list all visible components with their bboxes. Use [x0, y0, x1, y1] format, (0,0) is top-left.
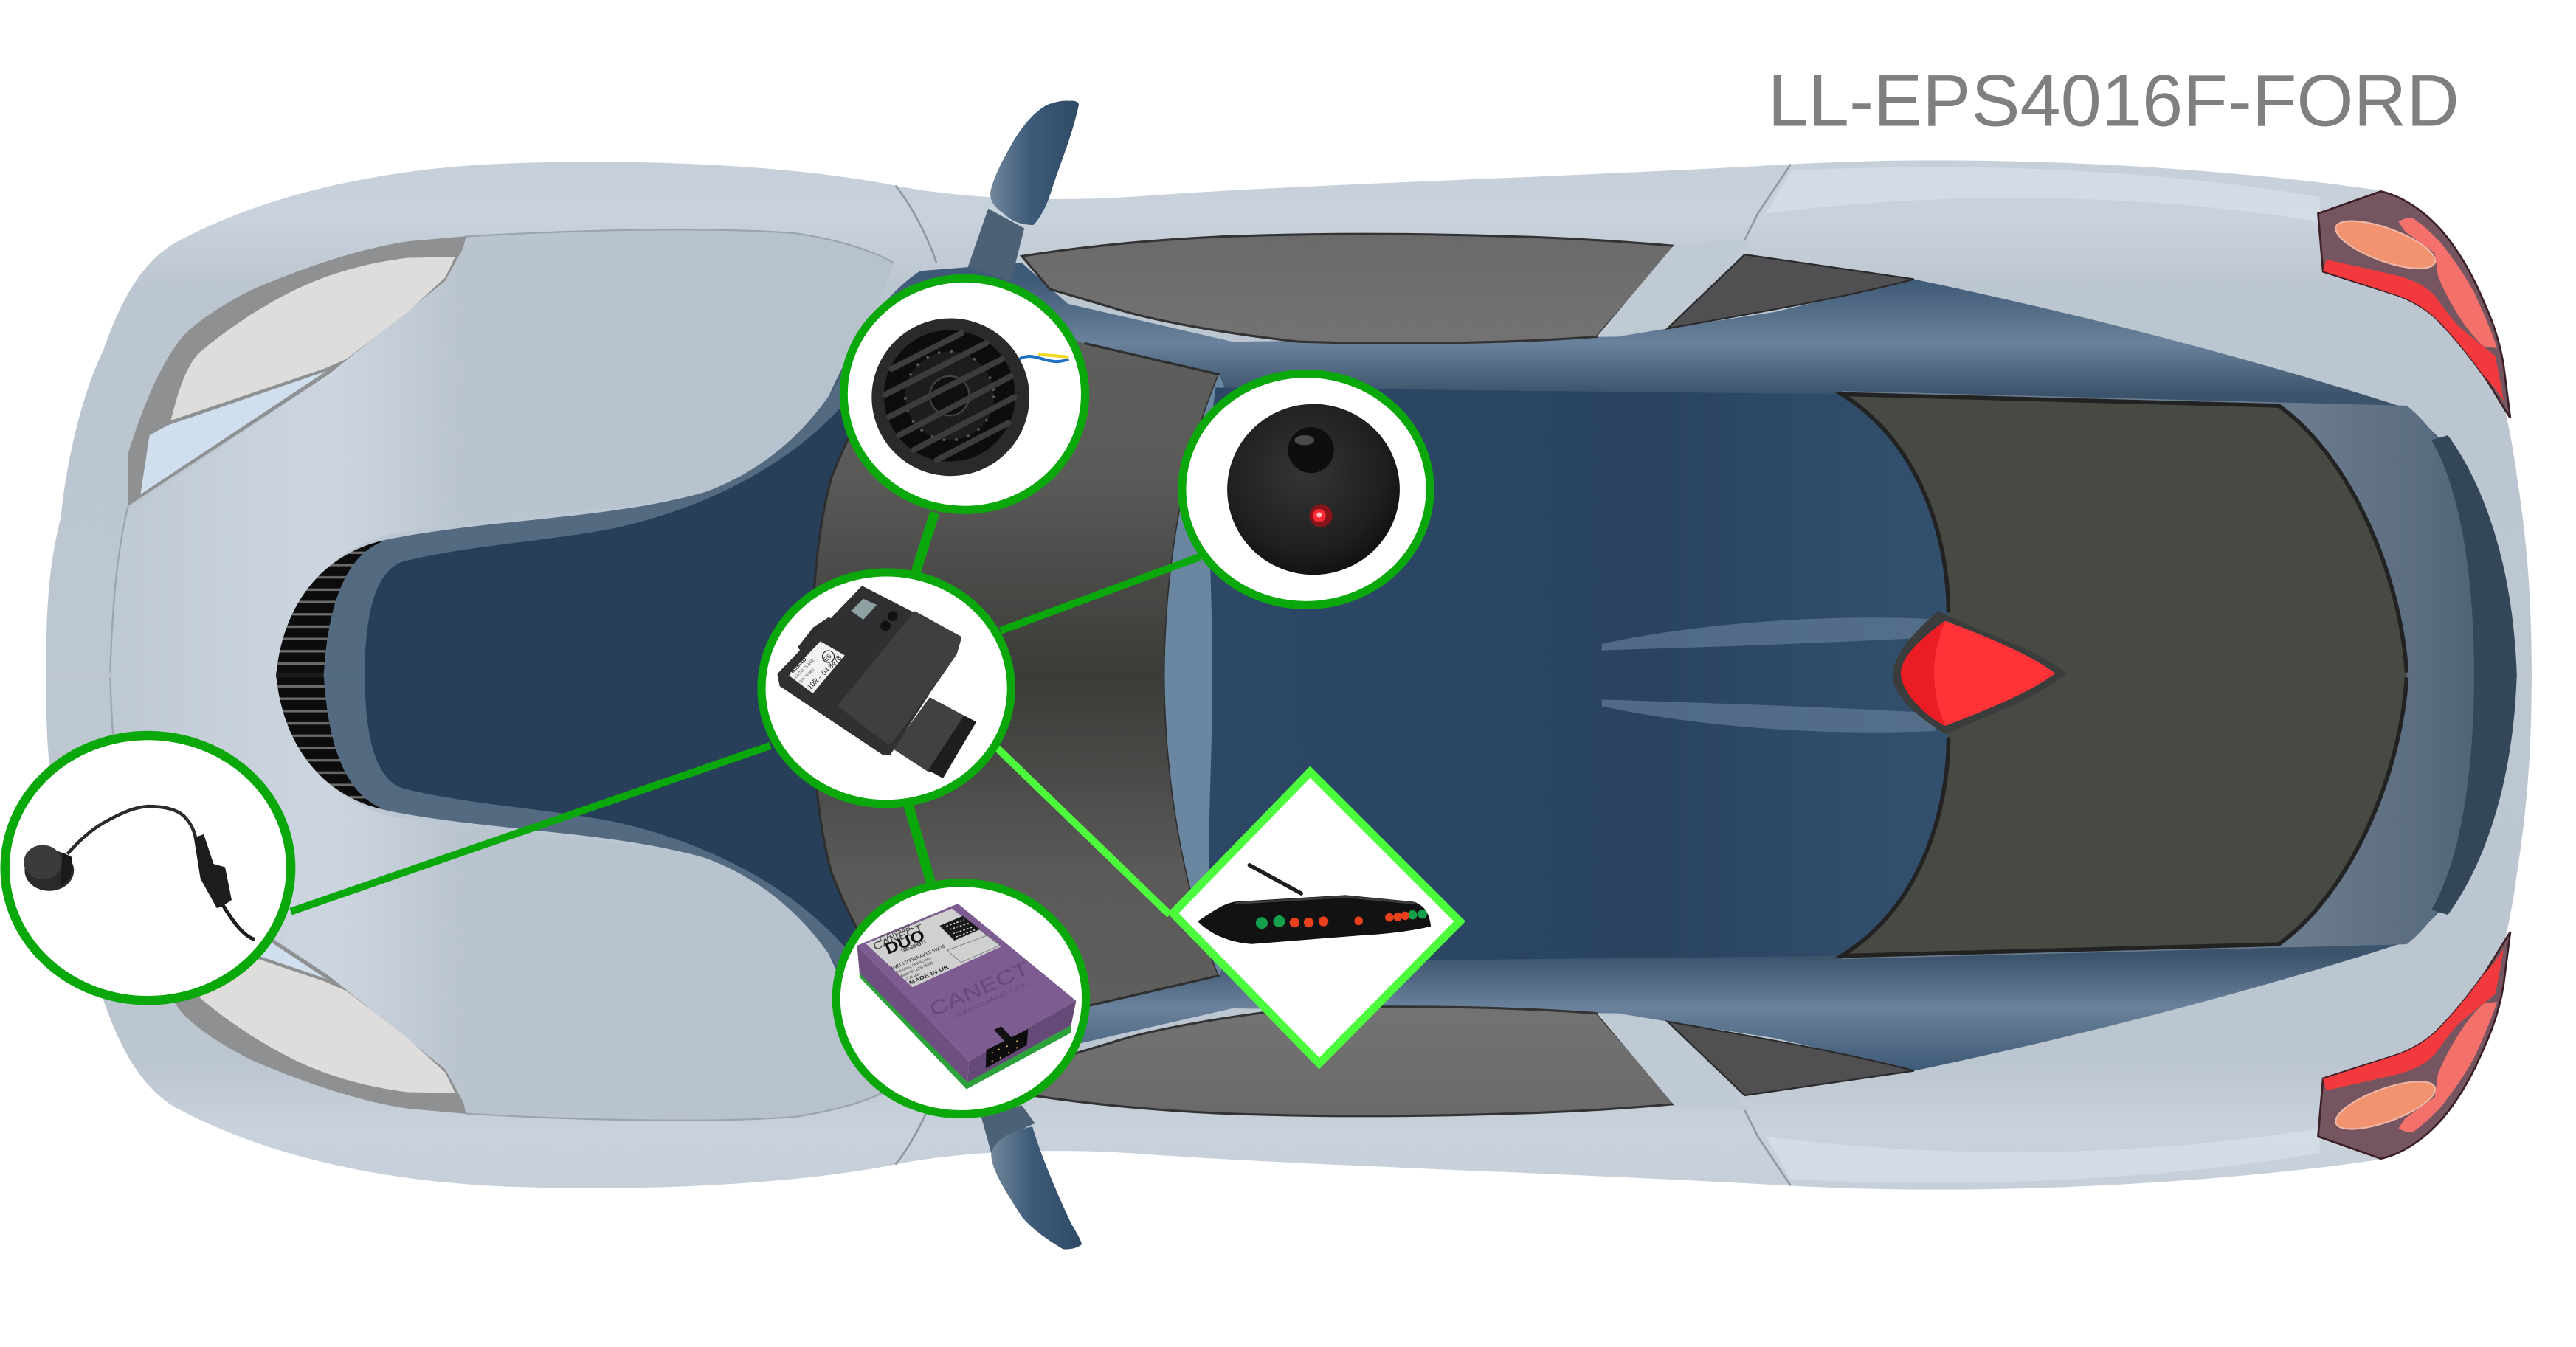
- icon: black module: [777, 586, 976, 778]
- side window: [1022, 234, 1679, 343]
- unit embossed logo: CANECT: [926, 958, 1032, 1021]
- tail light: [2318, 191, 2510, 418]
- unit label: MADE IN UK: [908, 963, 950, 986]
- rear quarter window: [1668, 254, 1914, 328]
- unit label: [866, 909, 1001, 987]
- diamond: wireless LED display: [1173, 772, 1460, 1064]
- unit embossed logo: [926, 958, 1032, 1021]
- icon: round speaker grille: [871, 318, 1068, 476]
- roof: [1209, 387, 1948, 676]
- hood seam: [895, 165, 1791, 263]
- unit label: CANECT: [871, 923, 925, 953]
- module label: [786, 641, 845, 693]
- unit label: CANM8: [878, 924, 912, 944]
- body highlight rear: [1766, 167, 2320, 222]
- connector: module to sensor: [291, 746, 770, 912]
- unit label: 12 24 Vdc: [904, 972, 921, 983]
- centre line patch joining both halves: [46, 673, 2532, 677]
- connector: module to vent: [916, 513, 935, 572]
- windshield: [812, 304, 1219, 676]
- unit label: Batch No: 1234 56789: [900, 961, 933, 979]
- hood scoop vent: [276, 537, 402, 676]
- car top half: [46, 160, 2532, 676]
- cabin base: [805, 263, 2517, 676]
- high-level brake light: [1893, 611, 2067, 734]
- circle: control module: [762, 572, 1011, 804]
- roof side light band: [1165, 375, 1224, 676]
- icon: purple CAN unit: [857, 904, 1076, 1090]
- module label: S/N 70907: [798, 668, 816, 685]
- module label: E8: [822, 652, 833, 663]
- unit label: DUO: [883, 927, 928, 958]
- icon: domed LED switch: [1227, 404, 1400, 575]
- headlight lens: [171, 257, 455, 420]
- headlight blue strip: [140, 371, 326, 494]
- icon: sensor and cable: [24, 806, 255, 939]
- rear deck dark band: [2431, 435, 2517, 676]
- rear window: [1842, 394, 2407, 676]
- circle: speaker vent: [843, 278, 1085, 510]
- connector: module to CAN unit: [908, 806, 930, 882]
- connector: module to LED button: [1001, 557, 1200, 631]
- headlight housing: [128, 236, 466, 506]
- right wing mirror: [981, 1105, 1082, 1250]
- title: LL-EPS4016F-FORD: [1768, 59, 2459, 141]
- rear deck: [1842, 391, 2513, 676]
- hood edge line: [110, 229, 894, 675]
- circle: reversing sensor: [5, 735, 291, 1000]
- unit connector: [986, 1026, 1028, 1068]
- hood scoop frame: [324, 353, 854, 676]
- module label: 10R – 04 8478: [807, 654, 843, 691]
- left wing mirror: [967, 101, 1079, 281]
- unit embossed logo: WWW.CANM8.COM: [953, 980, 1029, 1019]
- unit label: 10R-058871: [900, 939, 928, 955]
- roof streak: [1602, 617, 1936, 651]
- module label: KBS5-4D: [786, 656, 808, 677]
- connector: module to wireless display: [997, 748, 1170, 915]
- unit label: HW:DU2 FW:NAV3.5 SW:38: [891, 944, 946, 972]
- door pillar: [1597, 240, 1750, 336]
- circle: CAN interface unit: [836, 883, 1086, 1115]
- hood panel: [110, 229, 894, 676]
- module label: 12/24V SW02: [793, 659, 815, 680]
- unit label: Copyright (c) CANM8 Limited: [895, 956, 932, 975]
- module LCD: [851, 599, 877, 620]
- windshield edge: [812, 304, 1219, 675]
- car bottom half: [46, 674, 2532, 1190]
- icon: LED display unit: [1198, 865, 1431, 944]
- circle: LED button: [1182, 373, 1430, 605]
- rear window edge: [1842, 394, 2407, 675]
- car body shell: [46, 160, 2532, 676]
- hood scoop centre: [365, 370, 871, 676]
